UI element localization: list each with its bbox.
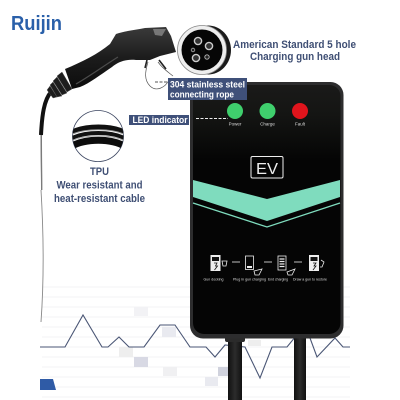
rope dashes bbox=[155, 81, 168, 83]
step icon: end charging bbox=[278, 256, 295, 275]
charging gun head circle bbox=[178, 26, 231, 74]
step icon: plug in bbox=[246, 256, 262, 275]
TPU text block: Wear resistant and bbox=[56, 180, 142, 192]
callout: LED indicator: LED indicator bbox=[132, 115, 188, 125]
background grid lines bbox=[42, 287, 350, 397]
step icon: draw a gun bbox=[309, 255, 324, 271]
EV badge: EV bbox=[256, 161, 278, 178]
charger housing bbox=[190, 82, 344, 338]
step captions: Plug in gun charging bbox=[233, 276, 266, 282]
gun highlight bbox=[76, 57, 118, 84]
heading: American Standard 5 hole bbox=[233, 39, 356, 63]
heading: American Standard 5 hole: Charging gun head bbox=[250, 51, 340, 63]
LED: charge bbox=[260, 103, 276, 126]
step captions: Gun docking bbox=[204, 276, 224, 282]
step icon: gun docking bbox=[210, 255, 227, 271]
logo: Ruijin: Ruijin bbox=[11, 13, 62, 35]
LED indicator dashes bbox=[196, 118, 228, 120]
TPU cable circle bbox=[70, 110, 126, 162]
charger front panel bbox=[193, 85, 340, 334]
heading: American Standard 5 hole: American Standard 5 hole bbox=[233, 39, 356, 51]
LED: fault bbox=[292, 103, 308, 126]
charging gun bbox=[47, 27, 176, 98]
EV badge bbox=[251, 156, 283, 178]
callout: 304 stainless steel connecting rope: 304 stainless steel bbox=[170, 80, 245, 90]
waveform line bbox=[40, 315, 350, 378]
step connector 1 bbox=[232, 261, 240, 263]
charging cable from gun bbox=[41, 92, 51, 322]
callout: 304 stainless steel connecting rope bbox=[168, 78, 247, 100]
gun top latch bbox=[153, 29, 166, 36]
strain relief bbox=[47, 72, 72, 98]
step connector 2 bbox=[264, 261, 272, 263]
LED: charge: Charge bbox=[260, 122, 275, 126]
step connector 3 bbox=[294, 261, 302, 263]
gun body bbox=[65, 27, 176, 89]
mint chevron bbox=[193, 180, 340, 221]
LED: fault: Fault bbox=[295, 122, 306, 126]
step captions bbox=[204, 276, 328, 282]
LED: power bbox=[227, 103, 243, 126]
callout: 304 stainless steel connecting rope: connecting rope bbox=[170, 90, 234, 100]
wall box cables bbox=[225, 336, 306, 400]
LED: power: Power bbox=[229, 122, 242, 126]
TPU text block bbox=[54, 166, 145, 205]
step captions: Draw a gun to restore bbox=[293, 276, 328, 282]
TPU text block: TPU bbox=[90, 166, 109, 178]
TPU text block: heat-resistant cable bbox=[54, 193, 145, 205]
step captions: End charging bbox=[268, 276, 288, 282]
decorative tinted squares bbox=[40, 307, 261, 390]
connecting rope bbox=[146, 62, 173, 89]
rope plugs bbox=[145, 60, 166, 69]
mint chevron line bbox=[193, 203, 340, 227]
EV charger wall box bbox=[190, 82, 344, 338]
